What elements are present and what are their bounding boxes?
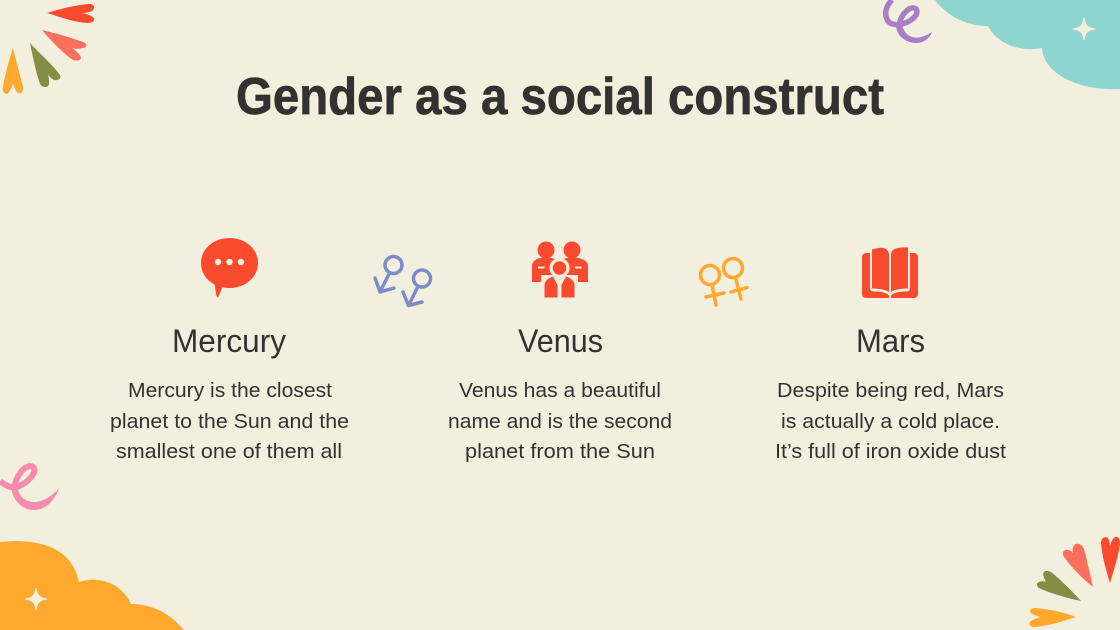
text: Venus description <box>448 379 672 463</box>
heading: Venus: Venus <box>518 323 603 359</box>
text: Mercury description: planet to the Sun and the <box>110 410 349 433</box>
text: Venus description: Venus has a beautiful <box>459 379 661 402</box>
icon: female symbols <box>700 258 747 305</box>
title: Gender as a social construct <box>236 67 884 125</box>
text: Mercury description <box>110 379 349 463</box>
icon: male symbols <box>375 256 430 306</box>
text: Mars description <box>775 379 1006 463</box>
text: Venus description: name and is the second <box>448 410 672 433</box>
heading: Mercury: Mercury <box>172 323 286 359</box>
panel: Venus <box>448 242 672 463</box>
text: Mars description: It’s full of iron oxide dust <box>775 440 1006 463</box>
panel: Mars <box>775 247 1006 463</box>
text: Mars description: Despite being red, Mars <box>777 379 1004 402</box>
heading: Mars: Mars <box>856 323 925 359</box>
icon: group of people <box>532 242 588 298</box>
decoration: teal cloud top-right <box>935 0 1120 89</box>
text: Mercury description: Mercury is the closest <box>128 379 332 402</box>
text: Venus description: planet from the Sun <box>465 440 655 463</box>
decoration: orange cloud bottom-left <box>0 541 184 630</box>
icon: open book <box>862 247 918 298</box>
text: Mars description: is actually a cold place. <box>781 410 1000 433</box>
decoration: purple ribbon <box>886 0 932 43</box>
icon: speech bubble <box>201 238 258 297</box>
text: Mercury description: smallest one of them all <box>116 440 342 463</box>
decoration: pink ribbon <box>0 466 59 510</box>
decoration: bottom-right petals <box>1029 537 1120 627</box>
panel: Mercury <box>110 238 349 463</box>
decoration: top-left petals <box>3 4 94 94</box>
